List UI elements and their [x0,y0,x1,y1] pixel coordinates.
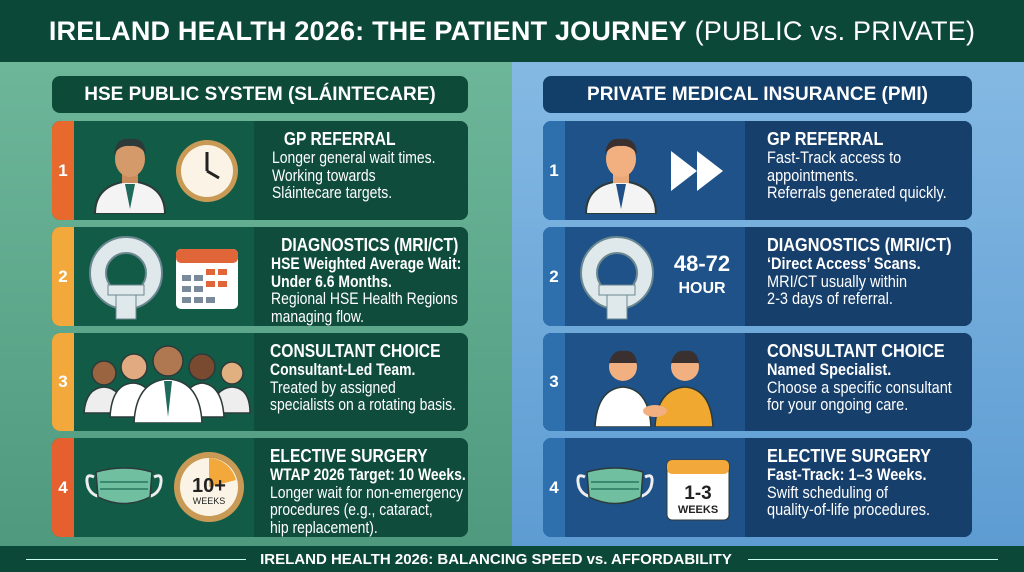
card: private 1 GP referral: appointments. [767,166,858,184]
card: private 4 surgery: quality-of-life procedures. [767,501,930,519]
card: private 2 diagnostics [543,227,972,326]
card: public 3 consultant [52,333,468,431]
panel header: PMI [543,76,972,113]
icon: 1-3 weeks calendar [666,460,730,520]
card: public 4 surgery: ELECTIVE SURGERY [270,445,428,466]
card: public 4 surgery: hip replacement). [270,518,378,536]
panel header: PMI: PRIVATE MEDICAL INSURANCE (PMI) [587,84,928,104]
icon: calendar [176,249,238,309]
icon: mask [576,467,654,504]
icon: doctor [585,138,657,214]
icon: fast forward [671,151,723,191]
card: private 2 diagnostics: DIAGNOSTICS (MRI/CT) [767,234,951,255]
background right blue [512,62,1024,546]
card: private 2 diagnostics: 2 [549,266,559,286]
card: private 1 GP referral [543,121,972,220]
icon: MRI scanner [580,236,654,320]
label: 48-72 hour [674,251,730,297]
card: public 2 diagnostics: Under 6.6 Months. [271,272,392,290]
icon: 10+ weeks clock: 10+ [192,475,226,497]
card: private 2 diagnostics: MRI/CT usually within [767,272,907,290]
card: public 2 diagnostics: DIAGNOSTICS (MRI/CT) [281,234,458,255]
card: public 3 consultant: specialists on a rotating basis. [270,396,456,414]
title [0,0,1024,62]
title: (PUBLIC vs. PRIVATE) [695,16,975,46]
card: private 3 consultant: Named Specialist. [767,361,891,379]
card: public 1 GP referral: GP REFERRAL [284,128,396,149]
card: public 3 consultant: 3 [58,372,68,391]
card: private 1 GP referral: 1 [549,160,559,180]
icon: clock [176,140,238,202]
icon: 1-3 weeks calendar: 1-3 [684,483,712,504]
footer: IRELAND HEALTH 2026: BALANCING SPEED vs. AFFORDABILITY [260,550,732,568]
card: private 4 surgery: ELECTIVE SURGERY [767,445,931,466]
card: public 2 diagnostics: Regional HSE Health Regions [271,290,458,308]
card: public 3 consultant: CONSULTANT CHOICE [270,340,441,361]
footer [0,546,1024,572]
card: public 1 GP referral: Working towards [272,166,376,184]
icon: doctor [94,138,166,214]
icon: MRI scanner [89,236,163,320]
card: public 2 diagnostics: 2 [58,266,68,286]
card: public 4 surgery: 4 [58,478,68,496]
card: private 3 consultant [543,333,972,431]
card: private 2 diagnostics: ‘Direct Access’ Scans. [767,255,921,273]
card: public 4 surgery: procedures (e.g., cataract, [270,501,433,519]
label: 48-72 hour: 48-72 [674,251,730,276]
icon: mask [85,467,163,504]
card: private 1 GP referral: GP REFERRAL [767,128,883,149]
card: private 4 surgery: 4 [549,478,559,496]
icon: 1-3 weeks calendar: WEEKS [678,504,718,516]
card: public 3 consultant: Treated by assigned [270,378,396,396]
card: public 2 diagnostics [52,227,468,326]
card: private 1 GP referral: Referrals generated quickly. [767,184,947,202]
card: public 4 surgery [52,438,468,537]
card: private 3 consultant: for your ongoing care. [767,396,908,414]
panel header: HSE public [52,76,468,113]
card: public 4 surgery: WTAP 2026 Target: 10 Weeks. [270,466,466,484]
card: public 1 GP referral: Longer general wait times. [272,149,436,167]
card: private 4 surgery: Fast-Track: 1–3 Weeks. [767,466,927,484]
card: private 2 diagnostics: 2-3 days of referral. [767,290,893,308]
panel header: HSE public: HSE PUBLIC SYSTEM (SLÁINTECARE) [84,84,436,104]
card: private 3 consultant: CONSULTANT CHOICE [767,340,945,361]
icon: team of doctors [83,345,251,423]
card: public 1 GP referral: 1 [58,160,68,180]
card: private 3 consultant: 3 [549,372,559,391]
label: 48-72 hour: HOUR [678,280,726,297]
icon: 10+ weeks clock: WEEKS [193,496,225,506]
card: private 1 GP referral: Fast-Track access to [767,149,901,167]
card: public 1 GP referral [52,121,468,220]
card: public 3 consultant: Consultant-Led Team. [270,361,415,379]
title: IRELAND HEALTH 2026: THE PATIENT JOURNEY [49,16,687,46]
card: public 2 diagnostics: HSE Weighted Average Wait: [271,255,461,273]
icon: handshake [594,350,714,427]
card: private 3 consultant: Choose a specific consultant [767,378,952,396]
background left green [0,62,512,546]
card: private 4 surgery: Swift scheduling of [767,484,888,502]
card: public 4 surgery: Longer wait for non-emergency [270,484,463,502]
card: public 1 GP referral: Sláintecare targets. [272,184,392,202]
icon: 10+ weeks clock [174,452,244,522]
card: public 2 diagnostics: managing flow. [271,308,364,326]
card: private 4 surgery [543,438,972,537]
